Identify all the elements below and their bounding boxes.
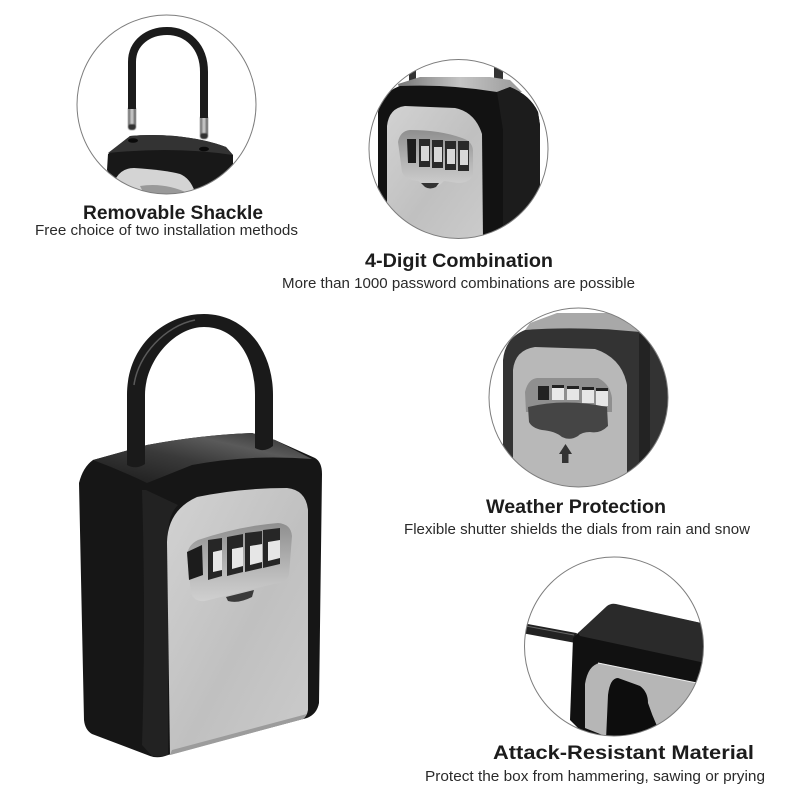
dial window bbox=[398, 130, 473, 188]
dial window bbox=[187, 523, 292, 601]
latch bbox=[407, 139, 416, 163]
dials bbox=[552, 385, 608, 406]
plate highlight bbox=[598, 663, 697, 683]
shackle bbox=[127, 314, 273, 467]
box top bbox=[107, 135, 233, 190]
panel: attack-resistant material bbox=[425, 557, 765, 785]
panel: main lock box bbox=[79, 314, 322, 757]
silver plate bbox=[513, 347, 627, 490]
plate bottom edge bbox=[170, 714, 307, 755]
dials bbox=[419, 139, 469, 171]
heading: Attack-Resistant Material bbox=[493, 743, 754, 764]
heading: Weather Protection bbox=[486, 497, 666, 518]
body bbox=[570, 618, 702, 735]
side shading bbox=[142, 490, 178, 756]
shackle bar bbox=[132, 31, 204, 118]
detail circle: shutter photo bbox=[503, 313, 668, 486]
body bbox=[503, 328, 668, 472]
circle outline bbox=[77, 15, 256, 194]
box body bbox=[79, 433, 322, 757]
top face bbox=[398, 77, 522, 92]
silver plate bbox=[116, 168, 194, 192]
side seam bbox=[639, 334, 650, 462]
detail circle: shackle photo bbox=[107, 27, 233, 194]
shackle tips bbox=[128, 108, 208, 139]
heading: 4-Digit Combination bbox=[365, 251, 553, 272]
description: Flexible shutter shields the dials from rain and snow bbox=[404, 521, 750, 538]
description: More than 1000 password combinations are possible bbox=[282, 275, 635, 292]
silver plate bbox=[387, 106, 483, 240]
circle outline bbox=[369, 60, 548, 238]
body bbox=[378, 86, 540, 240]
latch bbox=[538, 386, 549, 400]
shackle pins bbox=[409, 68, 503, 80]
top face bbox=[525, 313, 640, 332]
mounting holes bbox=[128, 138, 209, 151]
shackle cable bbox=[522, 628, 576, 638]
dials bbox=[208, 528, 280, 580]
tab bbox=[421, 183, 439, 188]
description: Free choice of two installation methods bbox=[35, 222, 298, 239]
heading: Removable Shackle bbox=[83, 203, 263, 224]
silver front plate bbox=[167, 488, 308, 755]
cover tab bbox=[226, 590, 254, 602]
silver plate bbox=[585, 663, 696, 736]
window edge bbox=[140, 185, 184, 194]
description: Protect the box from hammering, sawing or prying bbox=[425, 768, 765, 785]
flexible shutter bbox=[528, 402, 608, 439]
detail circle: material photo bbox=[526, 604, 703, 736]
top face bbox=[93, 433, 312, 483]
circle outline bbox=[489, 308, 668, 487]
detail circle: dials photo bbox=[378, 68, 540, 238]
circle outline bbox=[524, 557, 704, 736]
box top face bbox=[108, 135, 233, 155]
arrow up bbox=[559, 444, 572, 463]
inner black window bbox=[606, 678, 657, 740]
cable highlight bbox=[526, 626, 574, 635]
panel: 4-digit combination bbox=[282, 60, 635, 292]
panel: removable shackle bbox=[35, 15, 298, 239]
latch bbox=[187, 545, 203, 580]
side seam bbox=[497, 87, 540, 240]
top face bbox=[578, 604, 710, 664]
panel: weather protection bbox=[404, 308, 750, 538]
window bbox=[525, 378, 612, 412]
